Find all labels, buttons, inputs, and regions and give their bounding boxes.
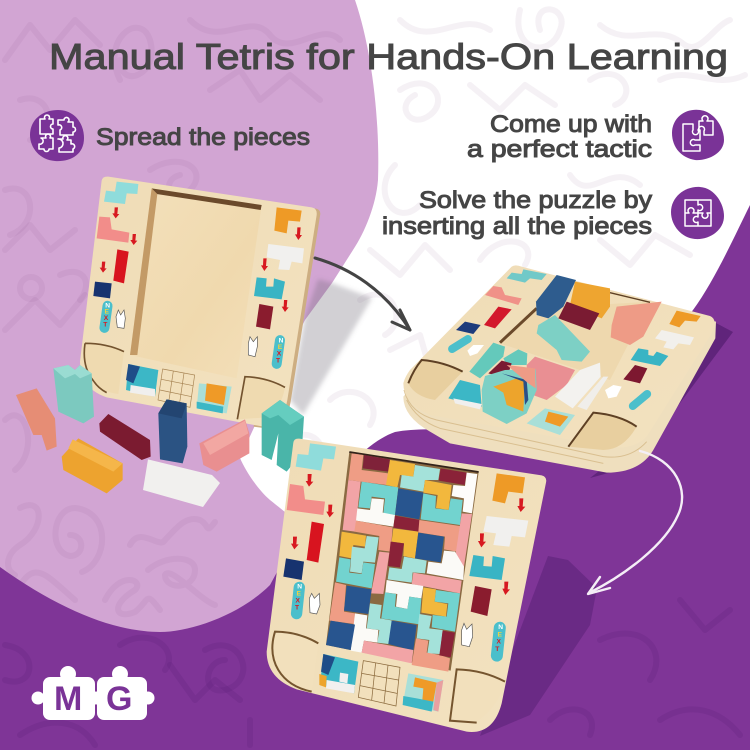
printed pieces left bbox=[283, 443, 336, 580]
title: Manual Tetris for Hands-On Learning bbox=[49, 36, 728, 77]
shadow of upright board bbox=[290, 279, 372, 415]
purple doodle pattern bbox=[5, 600, 740, 745]
next pills and hand icons: X bbox=[104, 315, 109, 322]
board 1: upright empty board with loose pieces bbox=[16, 177, 320, 507]
background: lilac region bbox=[0, 0, 378, 660]
next pills and hand icons bbox=[290, 581, 506, 662]
printed pieces right bbox=[469, 473, 528, 616]
icon: puzzle pieces joining bbox=[672, 110, 724, 160]
label: come up with a perfect tactic: Come up with bbox=[490, 111, 652, 138]
label: solve the puzzle by inserting all the pieces: inserting all the pieces bbox=[382, 213, 652, 240]
next pills and hand icons: T bbox=[495, 646, 499, 653]
loose piece: navy bbox=[158, 399, 187, 463]
next pills and hand icons: E bbox=[278, 344, 283, 351]
step 1: spread the pieces bbox=[30, 110, 310, 161]
label: come up with a perfect tactic: a perfect tactic bbox=[467, 136, 652, 163]
loose piece: pink bbox=[199, 419, 249, 472]
board 2: board being filled bbox=[403, 265, 716, 473]
icon: scattered puzzle pieces bbox=[30, 110, 84, 161]
mini cube left bbox=[319, 654, 358, 693]
next pills and hand icons: T bbox=[295, 604, 299, 611]
next pills and hand icons: X bbox=[295, 597, 300, 604]
next pills and hand icons: E bbox=[104, 309, 109, 316]
label: solve the puzzle by inserting all the pieces bbox=[382, 187, 652, 240]
printed puzzle pieces bbox=[93, 182, 304, 329]
label: come up with a perfect tactic bbox=[467, 111, 652, 163]
label: solve the puzzle by inserting all the pieces: Solve the puzzle by bbox=[419, 187, 652, 214]
shadows on the purple region bbox=[480, 322, 733, 736]
label: spread the pieces: Spread the pieces bbox=[96, 124, 310, 151]
board body bbox=[267, 439, 546, 732]
loose piece: salmon bbox=[16, 388, 57, 451]
next pills and hand icons: N bbox=[297, 583, 302, 590]
tray bbox=[130, 188, 262, 378]
next pills and hand icons: E bbox=[497, 631, 502, 638]
board 3: completed puzzle bbox=[267, 439, 546, 732]
logo letters: M bbox=[54, 680, 82, 718]
logo: MG bbox=[32, 666, 154, 720]
printed red arrows bbox=[100, 207, 302, 312]
board body bbox=[80, 177, 320, 428]
background: dark purple region bbox=[0, 205, 750, 750]
loose piece: teal bbox=[262, 400, 304, 472]
tray opening bbox=[500, 293, 650, 380]
printed pieces bbox=[447, 269, 701, 412]
step 2: come up with a perfect tactic bbox=[467, 110, 724, 163]
printed red arrows bbox=[291, 474, 525, 595]
mini cube right bbox=[403, 673, 443, 712]
icon: completed puzzle bbox=[671, 187, 724, 239]
next pills and hand icons: E bbox=[296, 590, 301, 597]
logo letters: G bbox=[106, 680, 132, 718]
next pills and hand icons: N bbox=[105, 302, 110, 309]
finger holes bbox=[84, 343, 285, 419]
next pills and hand icons bbox=[99, 300, 286, 370]
loose piece: mint bbox=[53, 365, 94, 423]
next pills and hand icons: N bbox=[498, 624, 503, 631]
next pills and hand icons: N bbox=[279, 337, 284, 344]
board base layers bbox=[403, 278, 716, 473]
next pills and hand icons: T bbox=[103, 321, 107, 328]
step 3: solve the puzzle bbox=[382, 187, 724, 240]
logo letters bbox=[54, 680, 132, 718]
finger holes bbox=[408, 360, 637, 450]
next pills and hand icons: T bbox=[276, 357, 280, 364]
pieces in play bbox=[469, 275, 662, 424]
printed mini cubes bbox=[448, 380, 575, 435]
tetris pieces grid bbox=[326, 453, 477, 672]
arrow from board 1 to board 2 bbox=[315, 258, 410, 330]
board top surface bbox=[403, 265, 715, 447]
next pills and hand icons: X bbox=[496, 639, 501, 646]
loose piece: white bbox=[143, 459, 220, 507]
arrow from board 2 to board 3 bbox=[588, 451, 682, 594]
loose piece: maroon bbox=[99, 414, 151, 460]
3x3 grid bbox=[358, 661, 400, 706]
next pills and hand icons: X bbox=[277, 351, 282, 358]
tray bbox=[326, 452, 479, 671]
loose piece: yellow bbox=[62, 438, 123, 493]
logo puzzle shapes bbox=[32, 666, 154, 720]
3x3 grid and mini cubes bbox=[126, 364, 232, 413]
finger holes bbox=[272, 632, 505, 723]
